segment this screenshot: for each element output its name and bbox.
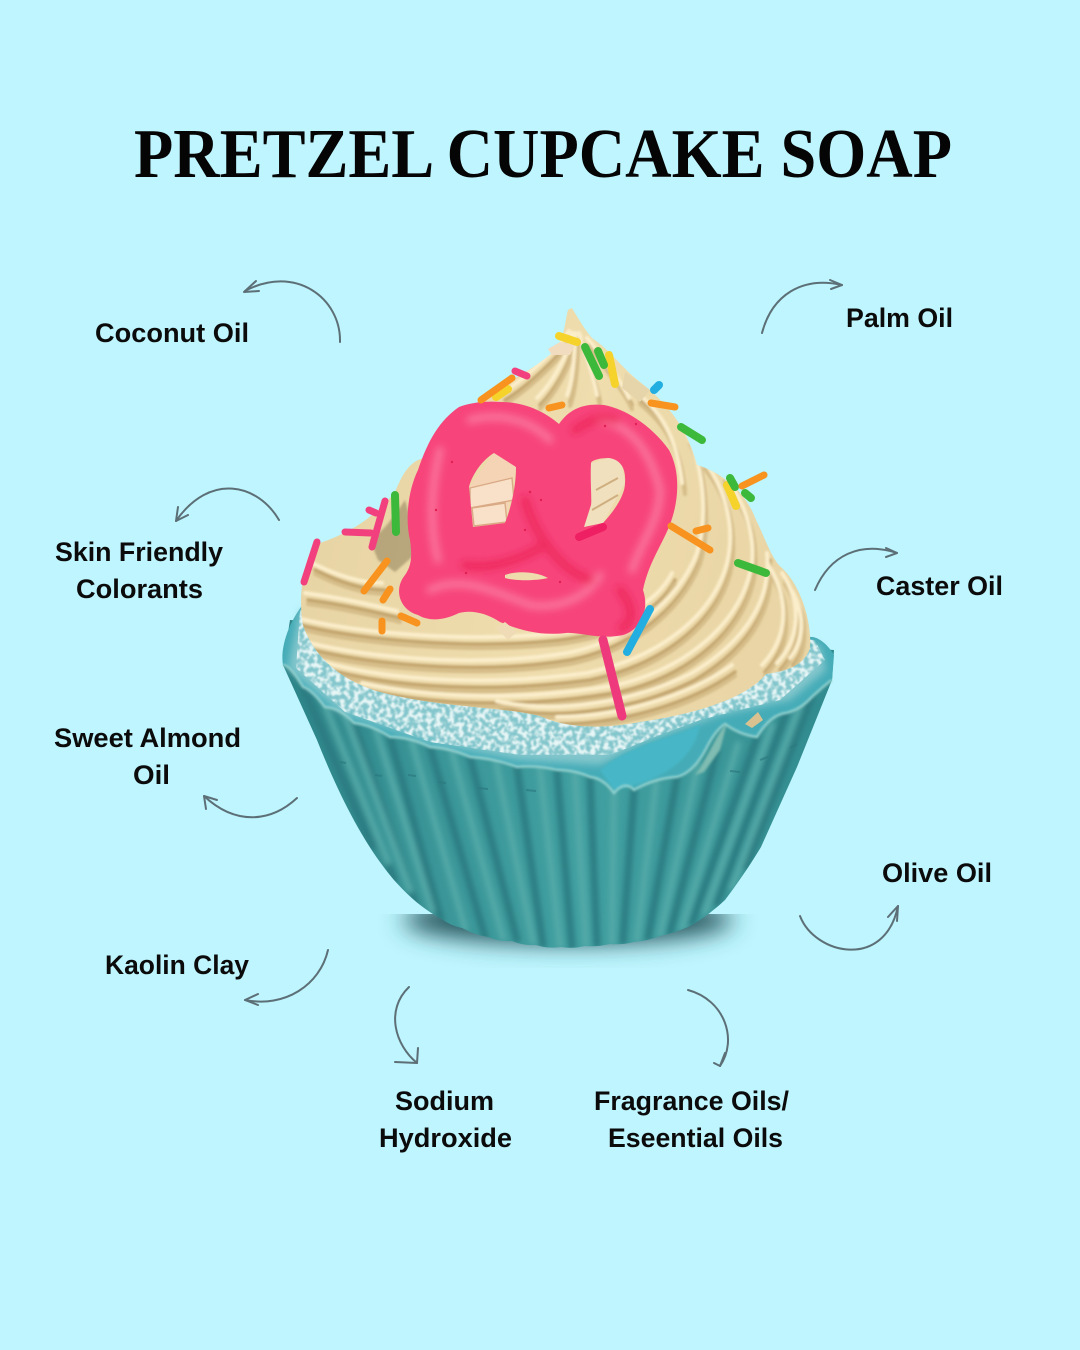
sprinkles <box>304 336 766 716</box>
label: Fragrance Oils / Essential Oils: Fragrance Oils/ <box>594 1086 790 1116</box>
cupcake shadow <box>403 896 733 944</box>
label: Skin Friendly Colorants <box>55 537 223 604</box>
frosting swirl <box>297 308 810 728</box>
arrow: Coconut Oil <box>244 281 340 342</box>
arrow: Caster Oil <box>815 548 897 590</box>
arrow: Sweet Almond Oil <box>204 796 297 817</box>
label: Sweet Almond Oil: Sweet Almond <box>54 723 241 753</box>
arrow: Olive Oil <box>800 906 898 950</box>
label: Sodium Hydroxide: Sodium <box>395 1086 494 1116</box>
arrow: Kaolin Clay <box>245 950 328 1005</box>
arrow: Sodium Hydroxide <box>395 987 418 1063</box>
arrow: Fragrance Oils <box>688 990 728 1066</box>
label: Palm Oil: Palm Oil <box>846 303 953 333</box>
cup liner <box>283 620 834 960</box>
label: Sodium Hydroxide: Hydroxide <box>379 1123 512 1153</box>
pretzel <box>399 402 677 637</box>
label: Kaolin Clay: Kaolin Clay <box>105 950 249 980</box>
label: Olive Oil: Olive Oil <box>882 858 992 888</box>
label: Skin Friendly Colorants: Skin Friendly <box>55 537 223 567</box>
label: Coconut Oil: Coconut Oil <box>95 318 249 348</box>
label: Skin Friendly Colorants: Colorants <box>76 574 203 604</box>
cupcake illustration <box>282 308 834 960</box>
label: Caster Oil: Caster Oil <box>876 571 1003 601</box>
arrow: Skin Friendly <box>176 488 279 521</box>
cup top surface <box>282 607 834 793</box>
label: Sodium Hydroxide <box>379 1086 512 1153</box>
arrow: Palm Oil <box>762 280 842 333</box>
label: Fragrance Oils / Essential Oils <box>594 1086 790 1153</box>
label: Sweet Almond Oil: Oil <box>133 760 170 790</box>
label: Fragrance Oils / Essential Oils: Eseential Oils <box>608 1123 783 1153</box>
title: PRETZEL CUPCAKE SOAP <box>134 116 952 193</box>
label: Sweet Almond Oil <box>54 723 241 790</box>
